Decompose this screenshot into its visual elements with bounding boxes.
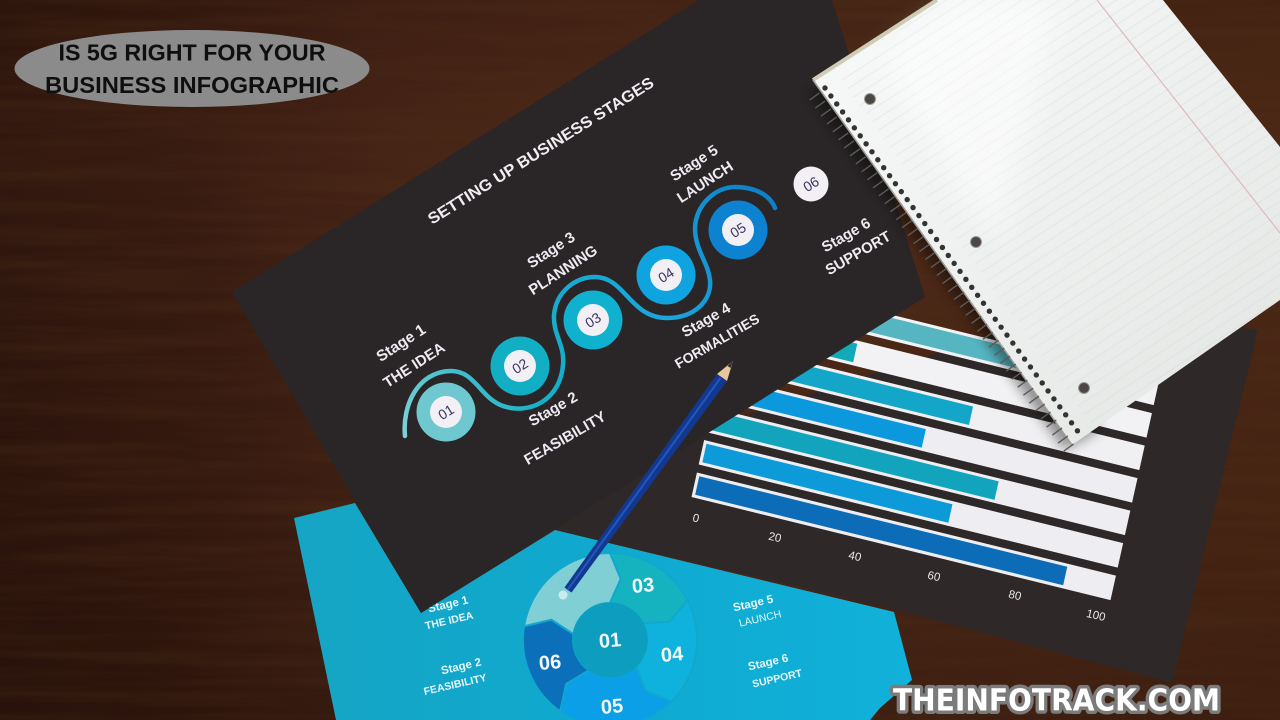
stage 02 node: 02 xyxy=(509,355,531,377)
teal sheet stage labels: FEASIBILITY xyxy=(423,672,488,698)
stage labels: LAUNCH xyxy=(674,158,736,207)
teal sheet stage labels: THE IDEA xyxy=(424,610,475,632)
bar chart rows xyxy=(692,278,1159,600)
chart axis labels: 100 xyxy=(1085,608,1106,624)
pencil xyxy=(558,361,733,600)
punched holes xyxy=(864,94,1090,394)
stage 06 node: 06 xyxy=(800,173,822,195)
teal sheet stage labels: Stage 6 xyxy=(747,653,790,673)
stage labels: FORMALITIES xyxy=(672,310,762,372)
panel: setting up business stages sheet xyxy=(232,0,925,613)
stage 05 node: 05 xyxy=(727,219,749,241)
stage labels: PLANNING xyxy=(526,242,601,299)
chart axis labels: 60 xyxy=(926,570,941,584)
notebook shadow xyxy=(808,80,1100,450)
teal sheet stage labels: LAUNCH xyxy=(738,608,783,630)
notebook cover edge xyxy=(813,0,937,80)
stage 02 node xyxy=(490,336,550,396)
chart axis labels: 40 xyxy=(847,550,862,564)
title text: BUSINESS INFOGRAPHIC xyxy=(45,72,339,98)
stage labels: Stage 4 xyxy=(679,299,734,341)
stage 03 node: 03 xyxy=(582,309,604,331)
stage labels xyxy=(374,142,894,469)
stage labels: FEASIBILITY xyxy=(521,408,609,469)
panel: spiral notebook xyxy=(813,0,1280,452)
chart axis labels xyxy=(691,512,1106,624)
stage labels: Stage 6 xyxy=(819,215,874,256)
teal sheet stage labels: Stage 5 xyxy=(732,593,775,614)
stage labels: SUPPORT xyxy=(823,228,894,279)
title text xyxy=(45,40,339,98)
chart axis labels: 20 xyxy=(767,531,782,545)
panel: teal stages sheet xyxy=(294,503,912,720)
ruled lines xyxy=(840,0,1280,430)
red margin line xyxy=(1097,0,1280,233)
stage 01 node xyxy=(416,382,476,442)
stage labels: THE IDEA xyxy=(380,339,448,392)
circular stage diagram xyxy=(523,553,697,720)
stage labels: Stage 3 xyxy=(524,229,578,272)
stage 04 node xyxy=(636,246,696,304)
stage 06 node xyxy=(794,166,828,202)
stage labels: Stage 5 xyxy=(667,142,721,185)
teal sheet stage labels: SUPPORT xyxy=(751,667,804,691)
diagram numbers xyxy=(538,574,685,719)
panel: bar chart sheet xyxy=(555,278,1258,683)
stage labels: Stage 2 xyxy=(526,389,581,430)
title pill xyxy=(14,30,370,107)
stage 05 node xyxy=(708,200,768,260)
spiral wire xyxy=(814,96,1072,452)
diagram numbers: 01 xyxy=(598,629,622,653)
notebook spine edge xyxy=(813,80,1072,445)
diagram numbers: 05 xyxy=(600,695,624,719)
page highlight xyxy=(880,0,1060,240)
chart axis labels: 80 xyxy=(1007,589,1022,603)
watermark: THEINFOTRACK.COM xyxy=(893,684,1220,718)
teal sheet stage labels xyxy=(423,593,804,720)
spiral holes xyxy=(825,88,1082,437)
diagram numbers: 03 xyxy=(631,574,655,598)
chart axis labels: 0 xyxy=(691,512,700,526)
wavy stage path xyxy=(405,187,775,436)
stage 01 node: 01 xyxy=(435,401,457,423)
diagram numbers: 06 xyxy=(538,651,562,675)
stage labels: Stage 1 xyxy=(374,321,429,366)
diagram numbers: 04 xyxy=(660,643,685,667)
stage 04 node: 04 xyxy=(655,264,677,286)
title text: IS 5G RIGHT FOR YOUR xyxy=(58,40,326,66)
sheet title: SETTING UP BUSINESS STAGES xyxy=(425,74,658,228)
stage 03 node xyxy=(564,290,622,350)
teal sheet stage labels: Stage 1 xyxy=(427,594,470,615)
teal sheet stage labels: Stage 2 xyxy=(440,657,483,677)
